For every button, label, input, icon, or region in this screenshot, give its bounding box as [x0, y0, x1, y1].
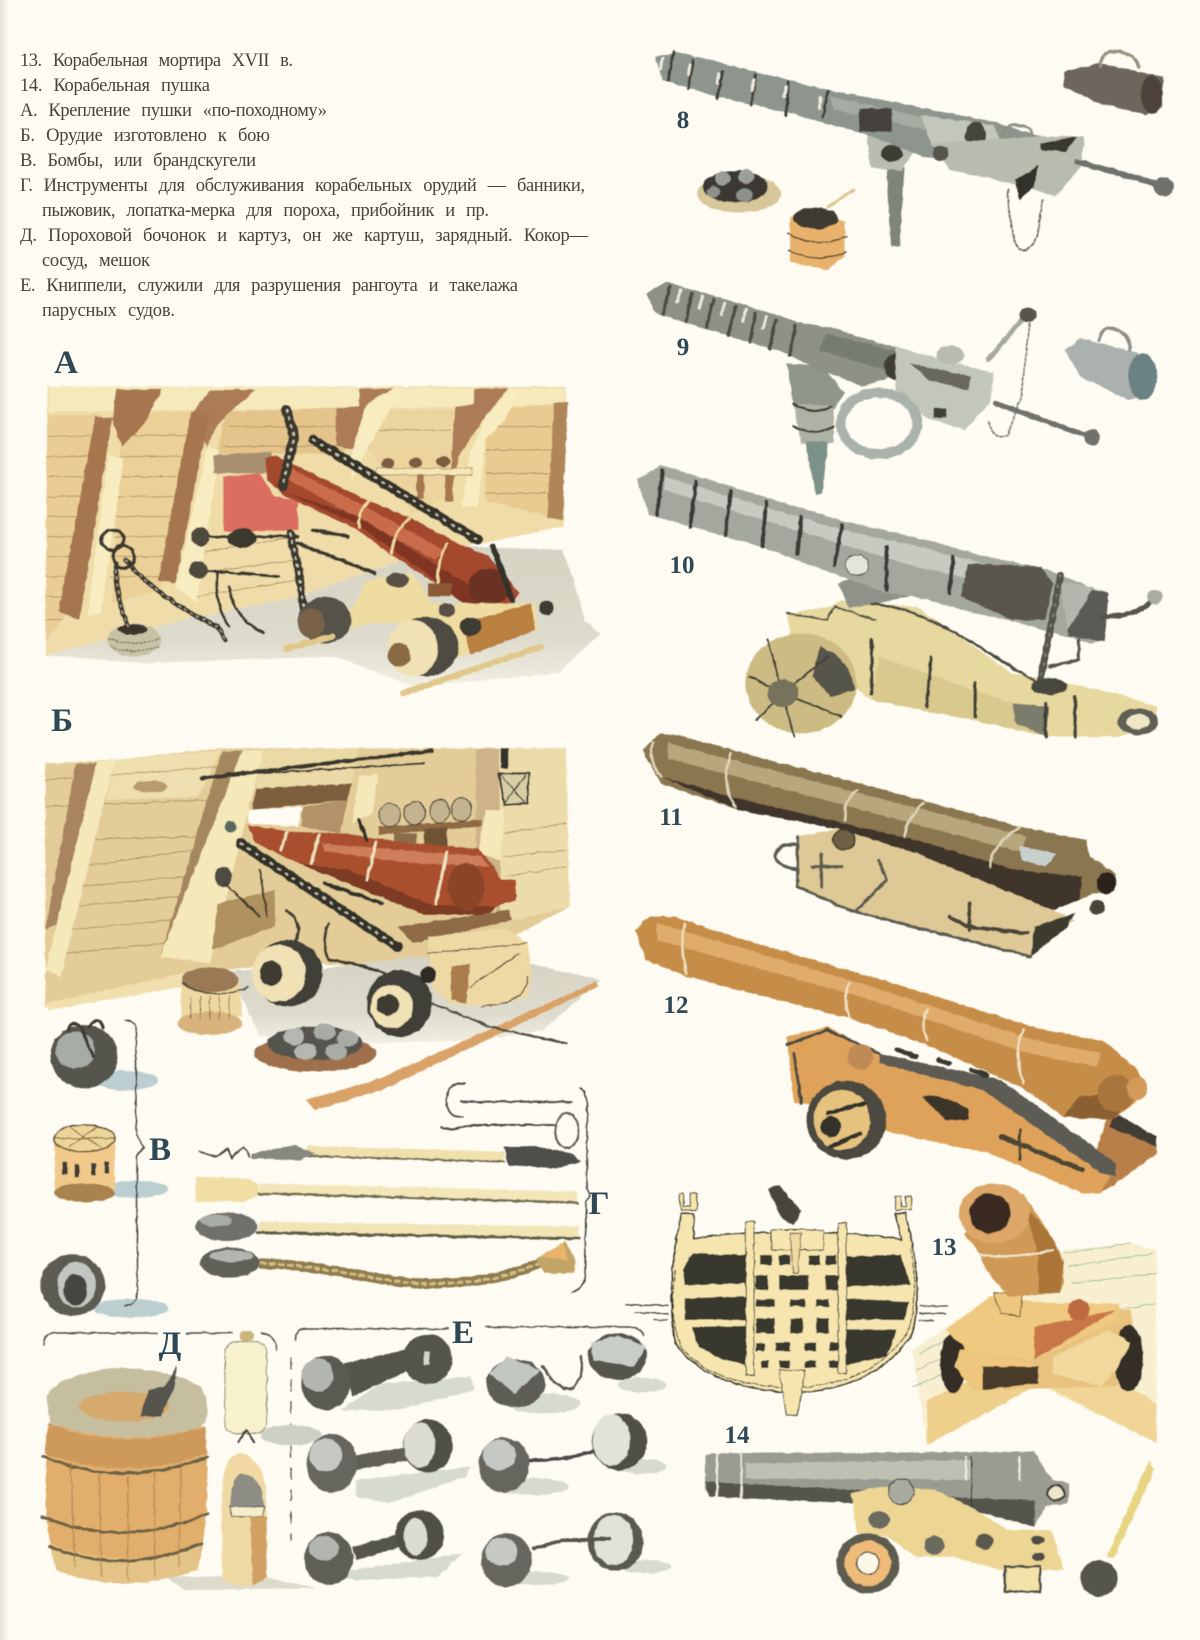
- bomb shadows: [93, 1071, 168, 1318]
- gun 12: [635, 917, 1156, 1193]
- gun port: [214, 452, 298, 532]
- split shot with chain: [486, 1333, 647, 1407]
- wall frames: [45, 748, 505, 1010]
- panel letters and gun numbers: 8: [677, 107, 689, 134]
- chain and key: [988, 308, 1036, 437]
- breeching rope: [283, 410, 512, 600]
- cannon barrel: [265, 455, 520, 610]
- top irons: [898, 1050, 986, 1075]
- trunnion: [845, 555, 869, 575]
- bomb with lugs: [51, 1020, 118, 1088]
- solid wheel: [746, 633, 857, 737]
- lantern: [499, 748, 529, 805]
- shot rack: [376, 456, 472, 502]
- shot rack: [378, 798, 482, 850]
- powder ladle and rope: [306, 982, 598, 1110]
- hook and worm tools: [441, 1083, 579, 1148]
- bracket Г: [572, 1088, 590, 1292]
- hull: [672, 1213, 917, 1393]
- stanchions and keel: [746, 1222, 846, 1415]
- powder chamber mug: [1065, 328, 1157, 400]
- caption text block: Б. Орудие изготовлено к бою: [20, 126, 270, 146]
- timber carriage: [786, 600, 1158, 737]
- chain: [1008, 190, 1043, 250]
- hollow bomb: [40, 1254, 105, 1316]
- powder keg: [42, 1365, 316, 1590]
- chain shot Е: [301, 1333, 671, 1587]
- panel letters and gun numbers: 14: [724, 1422, 750, 1449]
- upper works: [679, 1185, 912, 1250]
- caption text block: Е. Книппели, служили для разрушения рангоута и такелажа: [20, 276, 518, 296]
- panel letters and gun numbers: 13: [932, 1234, 956, 1261]
- panel letters and gun numbers: Б: [51, 703, 73, 739]
- firebomb drum: [54, 1125, 115, 1202]
- barrel: [637, 465, 1108, 643]
- mortar bed: [940, 1293, 1144, 1393]
- cannon barrel: [248, 825, 516, 915]
- gun 14: [704, 1452, 1155, 1597]
- mortar barrel: [959, 1183, 1064, 1297]
- caption text block: Д. Пороховой бочонок и картуз, он же картуш, зарядный. Кокор—: [20, 226, 588, 246]
- bracket Е: [295, 1327, 643, 1340]
- caption text block: А. Крепление пушки «по-походному»: [20, 101, 327, 121]
- dashed divider: [290, 1358, 292, 1540]
- panel letters and gun numbers: 10: [670, 552, 694, 579]
- tail handle: [995, 403, 1100, 445]
- mortar 13: [912, 1183, 1156, 1445]
- worm staff: [200, 1145, 582, 1168]
- carriage: [851, 1479, 1064, 1592]
- horseshoe ring: [841, 393, 917, 454]
- caption text block: 14. Корабельная пушка: [20, 76, 210, 96]
- bar shot 3: [304, 1510, 444, 1584]
- shot tray: [254, 1023, 376, 1072]
- gun 9: [646, 282, 1157, 495]
- floor: [45, 547, 600, 687]
- breech frame: [895, 346, 994, 430]
- powder kegs Д: [42, 1331, 322, 1590]
- gun port: [212, 783, 351, 950]
- panel letters and gun numbers: В: [149, 1132, 171, 1168]
- elevating arc: [872, 575, 1079, 695]
- bar shot 2: [307, 1419, 452, 1493]
- bar shot 1: [301, 1334, 452, 1410]
- rammer on wall: [133, 751, 432, 793]
- barrel: [704, 1452, 1070, 1527]
- breech frame: [932, 125, 1084, 200]
- bracket В: [125, 1020, 144, 1306]
- shadows: [332, 1377, 671, 1585]
- barrel: [646, 282, 906, 387]
- iron wheel: [806, 1081, 886, 1159]
- caption text block: парусных судов.: [42, 301, 175, 321]
- panel letters and gun numbers: 9: [677, 334, 689, 361]
- cartridge sack: [225, 1331, 322, 1445]
- gun carriage: [286, 573, 554, 693]
- caption text block: В. Бомбы, или брандскугели: [20, 151, 256, 171]
- gun carriage and wheels: [252, 910, 531, 1037]
- rope rammer: [200, 1242, 576, 1284]
- pedestal spike: [786, 363, 845, 495]
- mooring rope and coil: [101, 530, 225, 657]
- ship cross-section: [626, 1185, 947, 1415]
- panel letters and gun numbers: Е: [452, 1315, 474, 1351]
- panel letters and gun numbers: А: [54, 345, 78, 381]
- water lines: [626, 1305, 947, 1321]
- bombs В: [40, 1020, 168, 1318]
- gun 8: [655, 52, 1174, 270]
- shot basket: [697, 170, 781, 213]
- side tackles: [189, 527, 374, 633]
- tools Г: [195, 1083, 582, 1284]
- sponge staff: [195, 1177, 578, 1203]
- panel А: gun secured for sailing: [45, 387, 600, 693]
- rammer: [1081, 1460, 1155, 1597]
- barrel: [642, 733, 1116, 910]
- panel Б: gun ready for action: [45, 748, 600, 1110]
- gun 11: [642, 733, 1116, 957]
- deck: [912, 1243, 1156, 1445]
- carriage: [775, 827, 1105, 957]
- bracket Д: [44, 1333, 277, 1350]
- panel letters and gun numbers: Д: [159, 1326, 182, 1362]
- small powder bucket: [788, 190, 854, 270]
- kokor container: [222, 1453, 267, 1587]
- panel letters and gun numbers: 12: [664, 992, 688, 1019]
- panel letters and gun numbers: Г: [588, 1186, 610, 1222]
- powder chamber mug: [1063, 52, 1163, 115]
- wall frames: [59, 388, 568, 620]
- barrel: [655, 52, 1041, 158]
- caption text block: [20, 51, 588, 321]
- caption text block: пыжовик, лопатка-мерка для пороха, прибойник и пр.: [42, 201, 489, 221]
- barrel: [635, 917, 1148, 1120]
- caption text block: Г. Инструменты для обслуживания корабельных орудий — банники,: [20, 176, 585, 196]
- hinged shot 3: [481, 1512, 643, 1587]
- chained shot 2: [479, 1413, 647, 1492]
- caption text block: сосуд, мешок: [42, 251, 150, 271]
- tail hook: [1101, 589, 1162, 617]
- floor: [229, 957, 600, 1043]
- panel letters and gun numbers: 11: [659, 804, 683, 831]
- powder bucket: [177, 967, 248, 1035]
- gun 10: [637, 465, 1162, 737]
- panel letters and gun numbers: [51, 107, 956, 1449]
- carriage: [786, 1027, 1156, 1193]
- spike support: [866, 130, 917, 247]
- tail handle: [1077, 162, 1174, 196]
- wheel: [836, 1533, 899, 1593]
- rammer staff: [196, 1212, 579, 1241]
- caption text block: 13. Корабельная мортира XVII в.: [20, 51, 293, 71]
- dark hold compartments: [683, 1253, 910, 1368]
- tackle rope: [215, 820, 397, 947]
